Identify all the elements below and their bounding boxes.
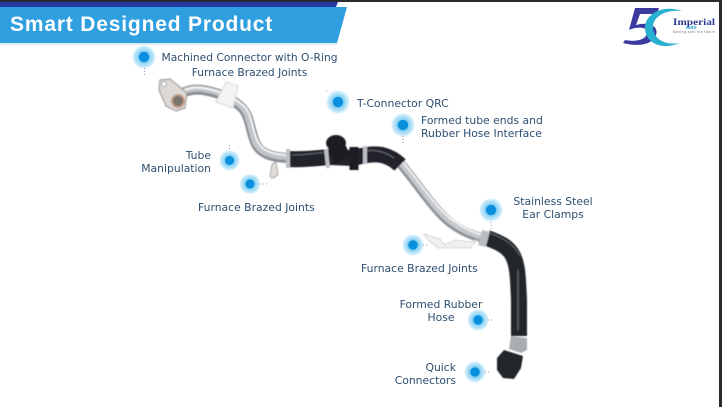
label: quick connectors: Connectors	[395, 374, 456, 386]
label: furnace brazed joints 1: Furnace Brazed Joints	[198, 201, 315, 214]
label: stainless steel ear clamps: Ear Clamps	[522, 208, 584, 220]
logo	[623, 8, 716, 46]
label: tube manipulation: Tube	[186, 149, 211, 162]
right edge	[719, 0, 722, 407]
hose assembly	[159, 79, 527, 379]
label: tube manipulation: Manipulation	[141, 162, 211, 174]
label: formed rubber hose: Hose	[428, 310, 454, 324]
label: formed rubber hose	[400, 298, 482, 324]
label: stainless steel ear clamps: Stainless Steel	[513, 195, 593, 208]
title: Smart Designed Product	[10, 13, 273, 36]
brazed bracket	[424, 234, 477, 248]
metal tube: upper	[159, 79, 287, 178]
label: formed tube ends: Formed tube ends and	[421, 114, 543, 127]
label: formed tube ends: Rubber Hose Interface	[421, 126, 542, 140]
logo: auto	[686, 25, 697, 31]
label: formed tube ends	[421, 114, 543, 140]
logo: Moving auto the future	[673, 30, 715, 34]
label: formed rubber hose: Formed Rubber	[400, 298, 482, 311]
bullets	[132, 46, 502, 382]
label: quick connectors: Quick	[425, 361, 456, 374]
metal tube: middle	[400, 161, 484, 238]
dotted leaders	[144, 68, 494, 372]
label: machined connector	[161, 51, 338, 79]
label: quick connectors	[395, 361, 456, 386]
label: tube manipulation	[141, 149, 211, 174]
bracket	[216, 82, 238, 108]
logo: Imperial	[673, 17, 716, 27]
ear clamp and quick connector	[497, 336, 527, 379]
label: T-connector: T-Connector QRC	[357, 97, 449, 110]
flange	[159, 79, 187, 111]
label: furnace brazed joints 2: Furnace Brazed Joints	[361, 262, 478, 275]
label: machined connector: Furnace Brazed Joints	[192, 66, 307, 79]
header banner	[0, 0, 722, 45]
rubber hose lower	[482, 231, 520, 336]
rubber hose with T connector	[287, 135, 400, 170]
label: machined connector: Machined Connector with O-Ring	[161, 51, 338, 64]
label: stainless steel ear clamps	[513, 195, 593, 220]
